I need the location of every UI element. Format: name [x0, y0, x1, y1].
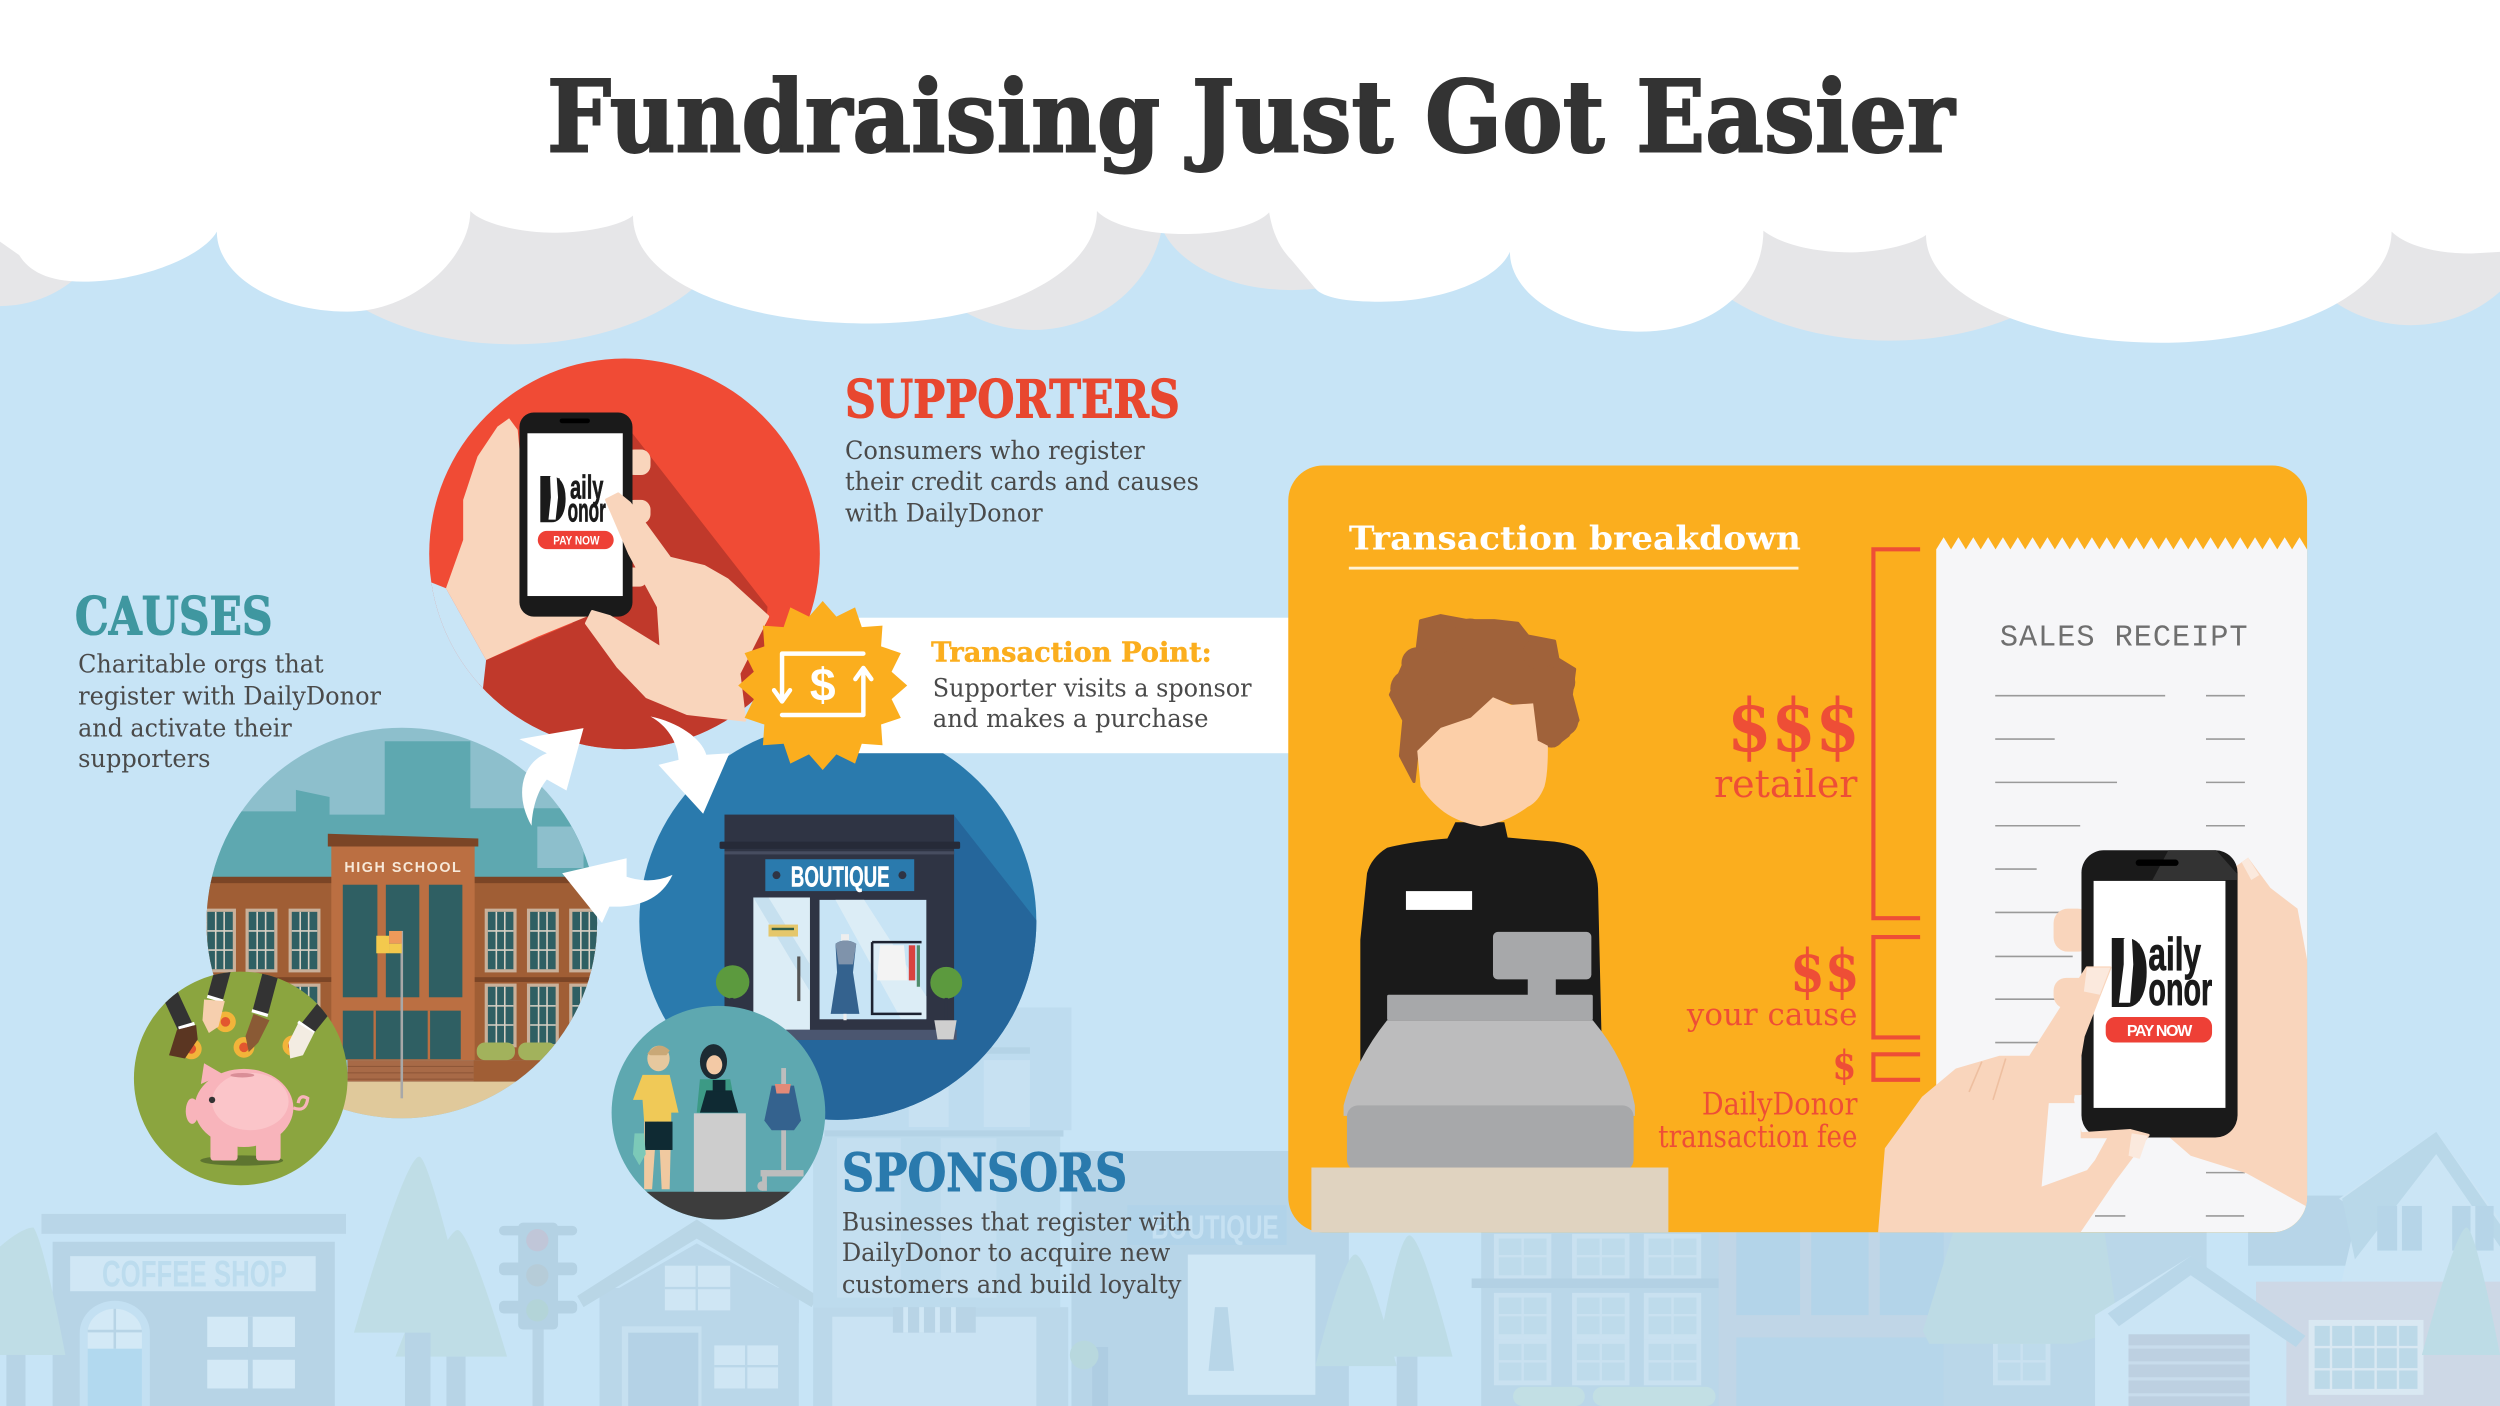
sales receipt [1936, 537, 2315, 1232]
phone: D [538, 463, 567, 536]
phone large: aily [2148, 928, 2201, 980]
causes heading and text: register with DailyDonor [78, 682, 382, 712]
supporters heading and text [845, 370, 1199, 528]
coins and hands [169, 1000, 314, 1059]
causes heading and text: CAUSES [75, 586, 273, 647]
amounts: $ [1832, 1043, 1856, 1089]
sponsors heading and text: DailyDonor to acquire new [842, 1238, 1170, 1268]
trees left [0, 1157, 507, 1406]
transaction point badge [738, 601, 907, 770]
icon: dollar exchange: $ [810, 659, 836, 711]
causes heading and text: and activate their [78, 713, 293, 743]
coffee shop: COFFEE SHOP [102, 1253, 287, 1294]
amounts: your cause [1686, 997, 1857, 1033]
phone large: PAY NOW [2127, 1023, 2193, 1040]
transaction point text [931, 638, 1252, 734]
circle: causes high school: HIGH SCHOOL [344, 860, 461, 876]
row of buildings right [1472, 1232, 2207, 1406]
circle: sponsors boutique [639, 723, 1052, 1132]
houses right [2095, 1132, 2500, 1406]
phone: PAY NOW [553, 534, 600, 548]
tall building behind sponsors [813, 1007, 1071, 1406]
cash register [1344, 932, 1635, 1171]
sponsors heading and text: customers and build loyalty [842, 1270, 1182, 1300]
causes heading and text [75, 586, 382, 774]
sales receipt: SALES RECEIPT [2000, 622, 2248, 656]
sponsors heading and text: SPONSORS [842, 1143, 1127, 1204]
left hand [1879, 968, 2148, 1232]
background town silhouette [0, 1007, 2500, 1406]
circle: piggy bank [134, 963, 348, 1185]
background boutique [1070, 1151, 1349, 1406]
fingers behind phone [2054, 908, 2082, 1096]
circle: supporters with phone [418, 359, 820, 757]
icon: dollar exchange [774, 654, 871, 715]
phone: onor [568, 493, 606, 530]
right hand [2167, 858, 2307, 1207]
supporters heading and text: with DailyDonor [845, 498, 1043, 528]
amounts: $$ [1790, 937, 1860, 1006]
supporters heading and text: Consumers who register [845, 436, 1146, 466]
sponsors heading and text: Businesses that register with [842, 1208, 1191, 1238]
phone: aily [570, 469, 604, 506]
phone large: D [2109, 918, 2148, 1027]
arrow: supporters to sponsors [651, 717, 729, 814]
white transaction band [823, 618, 1301, 753]
supporters heading and text: SUPPORTERS [845, 370, 1180, 431]
pointing hand [587, 494, 768, 720]
brackets [1873, 549, 1920, 1080]
circle: causes high school [199, 728, 606, 1121]
background boutique: BOUTIQUE [1151, 1210, 1279, 1247]
hands with phone [1879, 850, 2307, 1232]
piggy [186, 1063, 308, 1166]
phone large: onor [2148, 963, 2212, 1015]
causes heading and text: supporters [78, 744, 210, 774]
transaction point text: Transaction Point: [931, 638, 1212, 669]
circle: shop interior [606, 1006, 829, 1224]
panel heading: Transaction breakdown [1349, 518, 1801, 557]
boutique shop front: BOUTIQUE [791, 861, 890, 893]
trees middle [1315, 1235, 1452, 1406]
amounts: transaction fee [1658, 1119, 1857, 1155]
traffic light [499, 1223, 577, 1406]
left hand holding phone [446, 418, 651, 660]
counter [1311, 1168, 1668, 1232]
clouds [0, 0, 2500, 344]
arrow: sponsors to causes [562, 858, 673, 923]
central house [577, 1219, 818, 1406]
phone [519, 413, 632, 617]
receipt gap between fingers [2042, 1103, 2107, 1187]
sponsors heading and text [842, 1143, 1191, 1300]
trees in front of buildings [1923, 1232, 2119, 1344]
causes heading and text: Charitable orgs that [78, 650, 324, 680]
cashier [1360, 615, 1601, 1062]
curly hair [1390, 615, 1578, 781]
amounts [1658, 683, 1860, 1155]
transaction point text: and makes a purchase [933, 704, 1209, 734]
supporters heading and text: their credit cards and causes [845, 467, 1199, 497]
coffee shop [41, 1214, 346, 1406]
phone large [2081, 850, 2238, 1138]
title: Fundraising Just Got Easier [547, 59, 1956, 175]
grey back clouds [0, 70, 2500, 344]
arrow: causes to supporters [519, 728, 584, 826]
amounts: $$$ [1727, 683, 1860, 769]
panel: transaction breakdown [1288, 465, 2315, 1232]
boutique shop front [716, 815, 962, 1040]
amounts: retailer [1714, 762, 1858, 807]
amounts: DailyDonor [1702, 1086, 1858, 1122]
white front cloud [0, 0, 2500, 343]
transaction point text: Supporter visits a sponsor [933, 674, 1252, 704]
